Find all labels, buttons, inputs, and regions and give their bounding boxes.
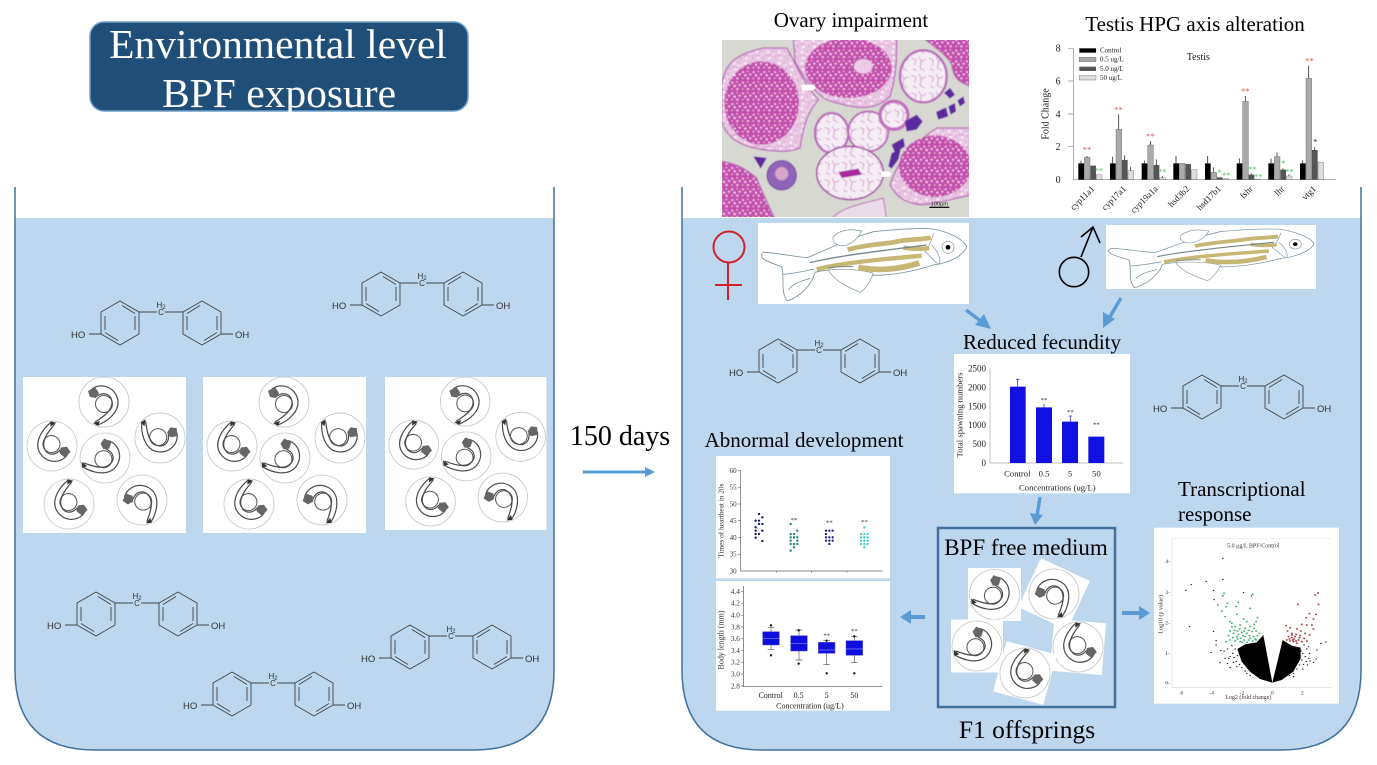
heading: transcriptional response: Transcriptional [1178, 477, 1306, 501]
spawning bar chart: Concentrations (ug/L) [1019, 482, 1096, 492]
testis bar chart: 6 [1056, 76, 1061, 87]
testis bar chart: ** [1248, 165, 1256, 174]
molecule: BPF 4 [361, 625, 539, 669]
title box [90, 21, 468, 116]
molecule: BPF 3: HO [47, 621, 61, 632]
heartbeat dot plot: 35 [730, 551, 737, 559]
molecule: BPF 4: C [448, 632, 454, 641]
spawning bar chart: 1500 [968, 401, 987, 411]
embryo card b [1009, 549, 1099, 639]
ovary histology image [720, 38, 973, 220]
molecule: BPF 7: C [1240, 382, 1246, 391]
testis bar chart: ** [1158, 168, 1166, 177]
heading: reduced fecundity: Reduced fecundity [963, 330, 1122, 354]
testis bar chart: * [1281, 159, 1285, 168]
testis bar chart: vtg1 [1300, 184, 1318, 202]
molecule: BPF 2: 2 [423, 276, 427, 282]
heartbeat dot plot: 45 [730, 517, 737, 525]
heading: testis alteration: Testis HPG axis alteration [1085, 12, 1305, 36]
testis bar chart: cyp11a1 [1068, 184, 1096, 212]
heartbeat dot plot: ** [791, 517, 798, 524]
heartbeat dot plot: Times of heartbeat in 20s [717, 483, 726, 558]
testis bar chart: ** [1254, 172, 1262, 181]
heartbeat dot plot: 60 [730, 467, 737, 475]
embryos panel 3 [383, 377, 554, 532]
volcano plot: 0 [1271, 690, 1274, 696]
molecule: BPF 6: C [816, 346, 822, 355]
testis bar chart: ** [1146, 131, 1155, 141]
testis bar chart: 0 [1056, 175, 1061, 186]
molecule: BPF 5: H [268, 672, 274, 681]
volcano plot: 4- [1165, 559, 1170, 565]
testis bar chart: 0.5 ug/L [1100, 56, 1124, 64]
body length box plot: 50 [850, 691, 858, 700]
female fish panel [758, 223, 969, 304]
testis bar chart: ** [1114, 104, 1123, 114]
molecule: BPF 4: HO [361, 654, 375, 665]
spawning bar chart [954, 354, 1130, 493]
molecule: BPF 7: H [1238, 375, 1244, 384]
molecule: BPF 2 [332, 272, 510, 316]
body length box plot: 4.2 [731, 599, 740, 608]
embryos panel 2 [201, 377, 373, 535]
body length box plot [716, 581, 890, 711]
testis bar chart: ** [1241, 86, 1250, 96]
male symbol [1059, 227, 1100, 287]
testis bar chart: ** [1305, 55, 1314, 65]
molecule: BPF 4: 2 [452, 629, 456, 635]
BPF free medium box [938, 528, 1115, 715]
body length box plot: Concentration (ug/L) [776, 702, 844, 711]
testis bar chart: hsd17b1 [1194, 184, 1223, 212]
testis bar chart: cyp19a1a [1128, 184, 1160, 215]
heading: transcriptional response [1178, 477, 1306, 526]
molecule: BPF 6: OH [893, 368, 907, 379]
testis bar chart: lhr [1272, 184, 1286, 198]
testis bar chart: 4 [1056, 109, 1061, 120]
testis bar chart: cyp17a1 [1099, 184, 1128, 212]
testis bar chart: ** [1095, 166, 1103, 175]
testis bar chart: 2 [1056, 142, 1061, 153]
embryo card c [942, 611, 1012, 681]
volcano plot: -6 [1179, 690, 1184, 696]
body length box plot: Body length (mm) [716, 610, 725, 669]
body length box plot: 3.8 [731, 622, 740, 631]
left tank [15, 187, 554, 750]
caption: F1 offsprings: F1 offsprings [959, 715, 1095, 744]
testis bar chart: 8 [1056, 44, 1061, 55]
molecule: BPF 6: H [814, 339, 820, 348]
heartbeat dot plot: 30 [730, 567, 737, 575]
testis bar chart: Testis [1187, 52, 1210, 63]
molecule: BPF 7 [1153, 375, 1331, 419]
embryos panel 1 [21, 377, 193, 535]
molecule: BPF 5 [183, 672, 361, 716]
body length box plot: ** [823, 632, 831, 639]
testis bar chart: ** [1083, 145, 1091, 155]
right tank [682, 187, 1361, 750]
heartbeat dot plot [716, 456, 890, 578]
title box: Environmental level [109, 21, 447, 67]
arrow: female to fecundity [966, 310, 991, 329]
spawning bar chart: Total spawning numbers [955, 372, 965, 457]
testis bar chart: * [1218, 168, 1222, 177]
heartbeat dot plot: 55 [730, 484, 737, 492]
body length box plot: 3.4 [731, 646, 740, 655]
spawning bar chart: ** [1093, 422, 1100, 429]
ovary histology image: 100μm [931, 202, 948, 208]
spawning bar chart: 500 [973, 439, 986, 449]
molecule: BPF 7: OH [1317, 404, 1331, 415]
molecule: BPF 6 [729, 339, 907, 383]
body length box plot: Control [758, 691, 784, 700]
molecule: BPF 1: H [156, 301, 162, 310]
molecule: BPF 5: C [270, 679, 276, 688]
molecule: BPF 1 [71, 301, 249, 345]
heading: abnormal development: Abnormal development [705, 428, 904, 452]
molecule: BPF 1: OH [235, 330, 249, 341]
molecule: BPF 5: HO [183, 701, 197, 712]
testis bar chart: 5.0 ug/L [1100, 65, 1124, 73]
testis bar chart: * [1313, 137, 1317, 147]
molecule: BPF 7: 2 [1244, 379, 1248, 385]
molecule: BPF 3: C [134, 599, 140, 608]
body length box plot: 2.8 [731, 681, 740, 690]
arrow: exposure duration [583, 467, 655, 477]
testis bar chart: fshr [1238, 184, 1255, 201]
title box: BPF exposure [162, 70, 396, 116]
volcano plot: 2- [1165, 620, 1170, 626]
molecule: BPF 5: OH [347, 701, 361, 712]
molecule: BPF 3: 2 [138, 596, 142, 602]
molecule: BPF 1: C [158, 308, 164, 317]
spawning bar chart: 0 [981, 458, 986, 468]
heartbeat dot plot: ** [861, 519, 868, 526]
spawning bar chart: 0.5 [1039, 469, 1049, 479]
heading: ovary impairment: Ovary impairment [774, 8, 928, 32]
molecule: BPF 4: OH [525, 654, 539, 665]
embryo card d [1042, 611, 1114, 683]
molecule: BPF 1: 2 [162, 305, 166, 311]
body length box plot: ** [851, 628, 858, 635]
volcano plot: -4 [1209, 690, 1214, 696]
molecule: BPF 2: OH [496, 301, 510, 312]
testis bar chart: Fold Change [1040, 88, 1051, 140]
heartbeat dot plot: 50 [730, 500, 737, 508]
body length box plot: 5 [825, 691, 829, 700]
molecule: BPF 2: C [419, 279, 425, 288]
body length box plot: 0.5 [794, 691, 804, 700]
testis bar chart: hsd3b2 [1166, 184, 1191, 209]
volcano plot: 5.0 μg/L BPF/Control [1227, 544, 1280, 550]
molecule: BPF 2: H [417, 272, 423, 281]
body length box plot: 4.4 [731, 587, 740, 596]
embryo card e [983, 631, 1067, 715]
molecule: BPF 6: 2 [820, 343, 824, 349]
spawning bar chart: 1000 [968, 420, 987, 430]
spawning bar chart: 2500 [968, 363, 987, 373]
volcano plot: 2 [1301, 690, 1304, 696]
body length box plot: 3.6 [731, 634, 740, 643]
molecule: BPF 7: HO [1153, 404, 1167, 415]
heartbeat dot plot: ** [826, 519, 833, 526]
volcano plot: -2 [1240, 690, 1245, 696]
molecule: BPF 2: HO [332, 301, 346, 312]
spawning bar chart: Control [1004, 469, 1031, 479]
arrow: male to fecundity [1103, 298, 1121, 328]
testis bar chart: Control [1100, 47, 1121, 55]
body length box plot: 3.2 [731, 658, 740, 667]
spawning bar chart: 2000 [968, 382, 987, 392]
testis bar chart: ** [1286, 168, 1294, 177]
duration label: 150 days [570, 421, 670, 452]
embryo card a [959, 559, 1030, 630]
molecule: BPF 3: OH [211, 621, 225, 632]
volcano plot: 1- [1165, 651, 1170, 657]
volcano plot: Log2 (fold change) [1225, 694, 1271, 701]
male fish panel [1106, 225, 1316, 289]
molecule: BPF 4: H [446, 625, 452, 634]
arrow: fecundity to offspring [1030, 497, 1043, 525]
arrow: offspring to transcription [1122, 606, 1150, 620]
spawning bar chart: ** [1041, 397, 1048, 404]
testis bar chart: ** [1222, 171, 1230, 180]
heartbeat dot plot: 40 [730, 534, 737, 542]
molecule: BPF 5: 2 [274, 676, 278, 682]
volcano plot: 0- [1165, 680, 1170, 686]
heading: transcriptional response: response [1178, 502, 1251, 526]
spawning bar chart: 5 [1068, 469, 1072, 479]
volcano plot [1154, 528, 1339, 704]
arrow: offspring to development [900, 610, 925, 624]
molecule: BPF 3 [47, 592, 225, 636]
BPF free medium box: BPF free medium [944, 535, 1108, 560]
spawning bar chart: 50 [1092, 469, 1101, 479]
testis bar chart: 50 ug/L [1100, 74, 1122, 82]
molecule: BPF 6: HO [729, 368, 743, 379]
body length box plot: 3.0 [731, 669, 740, 678]
spawning bar chart: ** [1067, 409, 1074, 416]
volcano plot: 3- [1165, 590, 1170, 596]
testis bar chart [1040, 40, 1340, 217]
female symbol [714, 232, 744, 300]
molecule: BPF 1: HO [71, 330, 85, 341]
volcano plot: Log10 (p value) [1158, 595, 1165, 634]
body length box plot: 4.0 [731, 611, 740, 620]
molecule: BPF 3: H [132, 592, 138, 601]
